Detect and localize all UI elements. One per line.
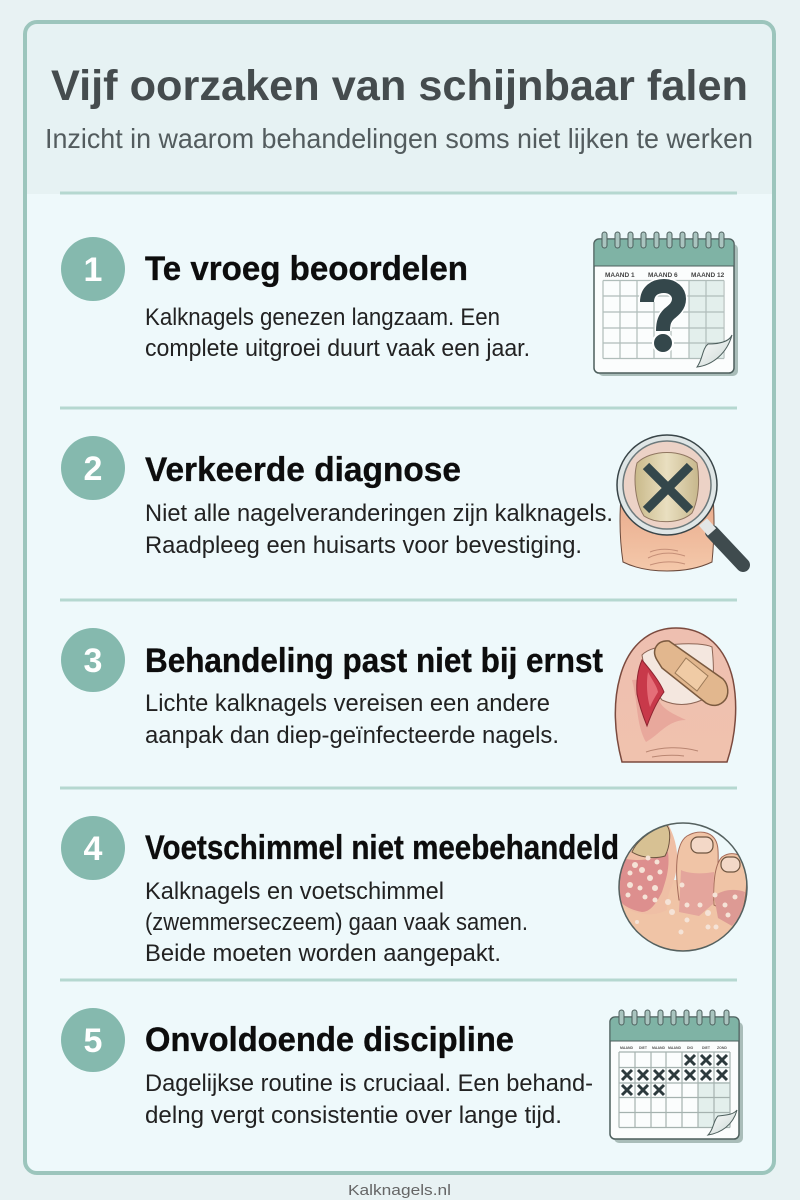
number badge 3: 3	[84, 642, 102, 680]
icon: calendar with crosses	[610, 1010, 743, 1143]
icon: calendar with question mark: MAAND 1	[605, 272, 635, 279]
text block 3: aanpak dan diep-geïnfecteerde nagels.	[145, 722, 559, 749]
icon: magnifier over nail	[617, 435, 743, 571]
icon: calendar with question mark: MAAND 6	[648, 272, 678, 279]
text block 4	[145, 878, 528, 967]
number badge 1: 1	[84, 251, 102, 289]
icon: calendar with crosses: ZOND	[717, 1046, 727, 1050]
text block 5	[145, 1070, 593, 1129]
text block 1: Kalknagels genezen langzaam. Een	[145, 304, 500, 331]
heading 3: Behandeling past niet bij ernst	[145, 642, 603, 680]
text block 5: Dagelijkse routine is cruciaal. Een behand-	[145, 1070, 593, 1097]
heading 1: Te vroeg beoordelen	[145, 250, 468, 288]
heading 5: Onvoldoende discipline	[145, 1021, 514, 1059]
text block 4: Beide moeten worden aangepakt.	[145, 940, 501, 967]
number badge 2: 2	[84, 450, 102, 488]
icon: calendar with question mark	[594, 232, 738, 376]
subtitle: Inzicht in waarom behandelingen soms niet lijken te werken	[45, 123, 753, 154]
icon: calendar with question mark: MAAND 12	[691, 272, 725, 279]
number badge 3	[61, 628, 125, 692]
text block 1: complete uitgroei duurt vaak een jaar.	[145, 335, 530, 362]
text block 3: Lichte kalknagels vereisen een andere	[145, 690, 550, 717]
icon: calendar with crosses: DIO	[687, 1046, 694, 1050]
icon: calendar with crosses: DIET	[702, 1046, 711, 1050]
number badge 4	[61, 816, 125, 880]
heading 4: Voetschimmel niet meebehandeld	[145, 829, 619, 867]
footer: Kalknagels.nl	[348, 1182, 451, 1199]
number badge 4: 4	[84, 830, 103, 868]
text block 5: delng vergt consistentie over lange tijd.	[145, 1102, 562, 1129]
number badge 5	[61, 1008, 125, 1072]
icon: calendar with crosses: DIET	[639, 1046, 648, 1050]
text block 4: Kalknagels en voetschimmel	[145, 878, 444, 905]
heading 2: Verkeerde diagnose	[145, 451, 461, 489]
text block 3	[145, 690, 559, 749]
icon: calendar with crosses: MAAND	[620, 1046, 633, 1050]
icon: toes with athlete's foot	[610, 823, 750, 955]
panel: cause 3	[61, 628, 736, 762]
panel: cause 4	[61, 816, 750, 967]
number badge 2	[61, 436, 125, 500]
number badge 5: 5	[84, 1022, 102, 1060]
panel: cause 2	[61, 435, 743, 571]
panel: cause 5	[61, 1008, 743, 1143]
text block 2: Niet alle nagelveranderingen zijn kalknagels.	[145, 500, 613, 527]
icon: calendar with crosses: MAAND	[652, 1046, 665, 1050]
text block 1	[145, 304, 530, 362]
panel: cause 1	[61, 232, 738, 376]
icon: wounded toe with plaster	[615, 628, 736, 762]
text block 4: (zwemmerseczeem) gaan vaak samen.	[145, 909, 528, 936]
text block 2	[145, 500, 613, 559]
icon: calendar with crosses: MAAND	[668, 1046, 681, 1050]
text block 2: Raadpleeg een huisarts voor bevestiging.	[145, 532, 582, 559]
title: Vijf oorzaken van schijnbaar falen	[51, 62, 748, 110]
number badge 1	[61, 237, 125, 301]
